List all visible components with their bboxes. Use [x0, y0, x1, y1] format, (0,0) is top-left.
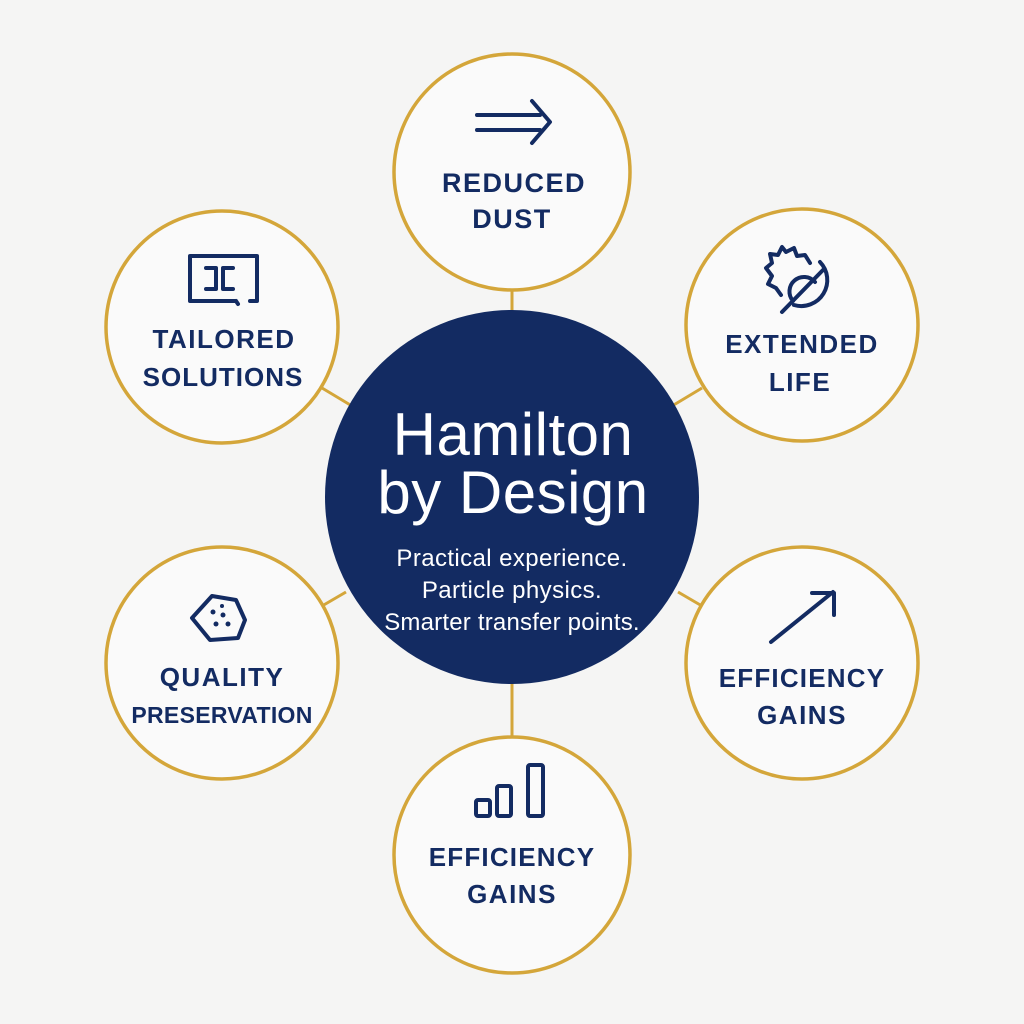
panel: efficiency gains right: [686, 547, 918, 779]
panel: quality preservation: PRESERVATION: [131, 702, 313, 728]
panel: reduced dust: DUST: [472, 204, 552, 234]
icon: frame: [190, 256, 257, 304]
panel: reduced dust: [394, 54, 630, 290]
panel: efficiency gains right: GAINS: [757, 700, 847, 730]
icon: trend arrow: [771, 592, 834, 642]
icon: arrow: [477, 101, 550, 143]
icon: particle: [192, 596, 245, 640]
icon: bar chart: [476, 765, 543, 816]
center subtitle: Practical experience.: [396, 545, 628, 572]
panel: reduced dust: REDUCED: [442, 168, 586, 198]
panel: extended life: LIFE: [769, 367, 831, 397]
panel: extended life: [686, 209, 918, 441]
panel: tailored solutions: SOLUTIONS: [143, 362, 303, 392]
icon: gear: [766, 247, 827, 312]
panel: quality preservation: [106, 547, 338, 779]
panel: efficiency gains bottom: GAINS: [467, 879, 557, 909]
panel: efficiency gains right: EFFICIENCY: [719, 663, 885, 693]
panel: extended life: EXTENDED: [725, 329, 879, 359]
panel: quality preservation: QUALITY: [160, 662, 284, 692]
panel: tailored solutions: TAILORED: [153, 324, 295, 354]
panel: efficiency gains bottom: [394, 737, 630, 973]
panel: tailored solutions: [106, 211, 338, 443]
center circle: [325, 310, 699, 684]
center circle: Smarter transfer points.: [384, 609, 640, 636]
center circle: by Design: [377, 459, 649, 526]
center circle: Particle physics.: [422, 577, 602, 604]
panel: efficiency gains bottom: EFFICIENCY: [429, 842, 595, 872]
center title: Hamilton: [393, 401, 633, 468]
